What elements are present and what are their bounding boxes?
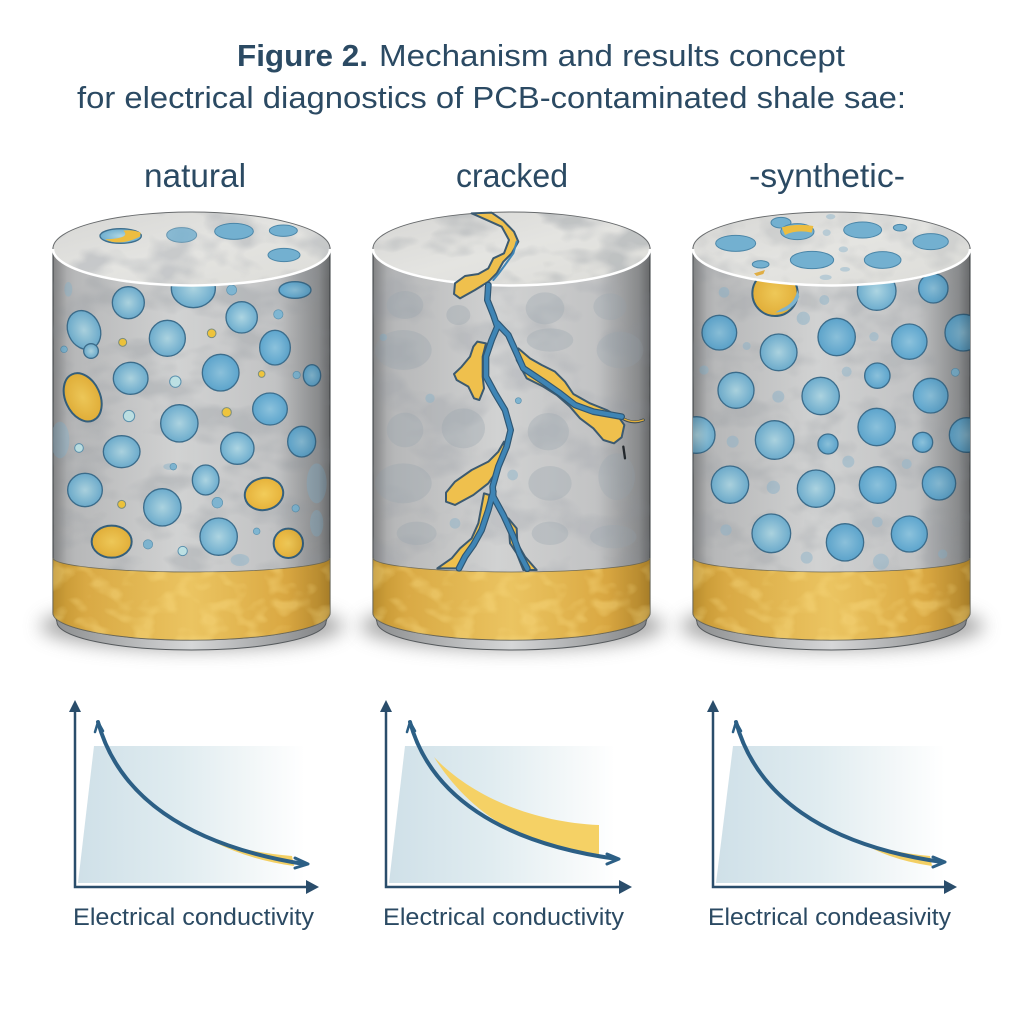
gold band and edge shading [53,248,330,645]
title: for electrical diagnostics of PCB-contaminated shale sae: [77,80,906,115]
synthetic pores on cylinder side [693,274,970,570]
chart: synthetic [707,700,957,931]
natural decay curve [95,722,308,868]
gold band and edge shading [693,248,970,645]
natural x-axis label: Electrical conductivity [73,904,314,931]
cracked body pale pore ghosts [375,291,643,548]
title: Figure 2. [237,38,368,73]
cracked top face [373,212,650,286]
synthetic yellow residual area [860,842,932,866]
title [77,38,906,115]
natural pores on cylinder side [51,269,327,566]
synthetic decay curve [733,722,945,867]
crack network with gold and blue veins [437,213,643,570]
cracked decay curve [407,722,619,864]
cracked axes [380,700,632,894]
label: natural: natural [144,157,246,194]
natural axes [69,700,319,894]
gold band and edge shading [373,248,650,645]
chart: cracked [380,700,632,931]
synthetic axes [707,700,957,894]
panel: natural shale cylinder [40,212,344,650]
cracked x-axis label: Electrical conductivity [383,904,624,931]
natural top face [53,212,330,286]
natural yellow residual area [214,842,294,866]
cracked yellow residual area [434,757,599,855]
chart: natural [69,700,319,931]
label: cracked: cracked [456,157,568,194]
synthetic top face [693,212,970,286]
label: synthetic: -synthetic- [749,157,905,194]
panel: cracked shale cylinder [360,212,664,650]
title: Mechanism and results concept [379,38,845,73]
panel: synthetic shale cylinder [678,212,984,650]
synthetic x-axis label: Electrical condeasivity [708,904,951,931]
